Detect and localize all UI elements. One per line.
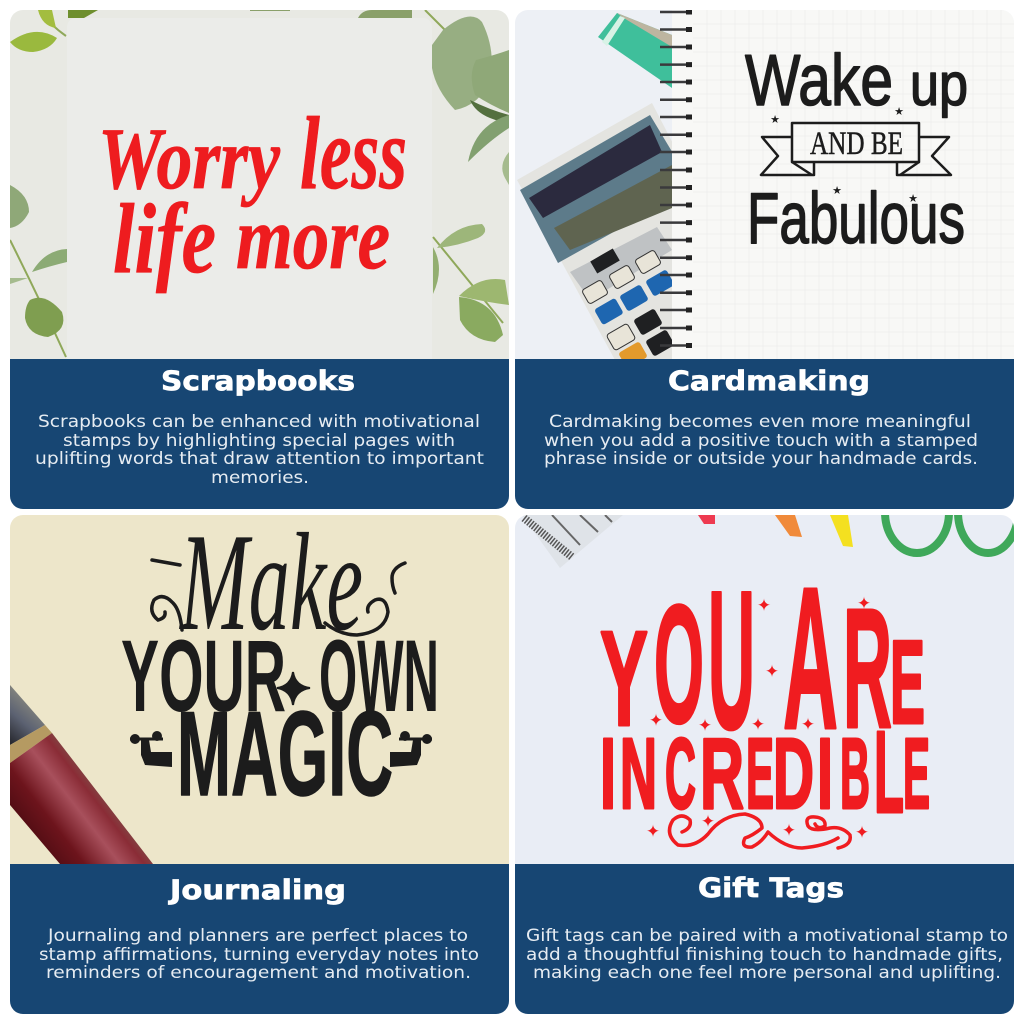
stamp phrase: Wake up and be Fabulous: up (910, 51, 968, 118)
caption block: Cardmaking (515, 359, 1014, 509)
stamp phrase: Make your own magic: Make (179, 505, 363, 660)
description: Gift Tags: making each one feel more personal and uplifting. (533, 963, 1001, 983)
stamp phrase: You are incredible: A (783, 545, 838, 771)
flourish (669, 814, 850, 848)
photo: desk with ruler, highlighters and scissors (515, 515, 1014, 864)
panel: Cardmaking (515, 10, 1014, 509)
caption block: Scrapbooks (10, 359, 509, 509)
stamp phrase: You are incredible: I (817, 718, 833, 830)
stamp phrase: You are incredible: Y (600, 603, 648, 754)
stamp phrase: Worry less life more (102, 116, 406, 294)
stamp phrase: You are incredible: R (700, 718, 744, 830)
panel: Scrapbooks (10, 10, 509, 509)
stamp phrase: Worry less life more: Worry (98, 111, 281, 208)
stamp phrase: You are incredible: E (890, 616, 925, 749)
sparkles: ✦ (757, 596, 771, 616)
photo: cream paper with fountain pen (10, 515, 509, 864)
sparkles: ✦ (649, 711, 663, 731)
caption block: Journaling (10, 864, 509, 1014)
description: Scrapbooks: memories. (211, 468, 309, 488)
description: Journaling: reminders of encouragement and motivation. (46, 963, 471, 983)
icon: eraser (598, 13, 672, 88)
sparkles: ✦ (646, 822, 660, 842)
panel: Journaling: OWN (319, 619, 439, 733)
stamp phrase: You are incredible (600, 588, 930, 850)
stars: ★ (908, 192, 918, 205)
icon: flexed arm left (130, 731, 172, 767)
sparkles: ✦ (801, 715, 815, 735)
description: Scrapbooks: uplifting words that draw attention to important (35, 449, 484, 469)
stars: ★ (832, 184, 842, 197)
stamp phrase: You are incredible: N (620, 718, 657, 830)
description: Scrapbooks: stamps by highlighting special pages with (63, 431, 455, 451)
photo: white card among green leaves (10, 10, 509, 368)
stars: ★ (894, 105, 904, 118)
icon: calculator (517, 103, 672, 359)
icon: fountain pen (10, 685, 153, 864)
sparkles: ✦ (751, 715, 765, 735)
stamp phrase: Wake up and be Fabulous: Wake (745, 41, 893, 121)
photo: calculator, eraser and spiral notebook (515, 10, 1014, 369)
stamp phrase: You are incredible: R (843, 574, 892, 764)
stamp phrase: You are incredible: I (600, 718, 616, 830)
scissors handles (881, 515, 1014, 557)
heading: Scrapbooks: Scrapbooks (161, 366, 355, 397)
stamp phrase: You are incredible: C (665, 718, 696, 830)
description: Scrapbooks: Scrapbooks can be enhanced with motivational (38, 412, 480, 432)
description: Scrapbooks (35, 412, 484, 488)
stamp phrase: You are incredible: E (746, 718, 774, 830)
stamp phrase: You are incredible: B (840, 718, 870, 830)
description: Gift Tags (526, 926, 1008, 983)
panel: Journaling (10, 505, 509, 1014)
heading: Journaling: Journaling (168, 875, 346, 906)
description: Gift Tags: add a thoughtful finishing touch to handmade gifts, (526, 945, 1003, 965)
stamp phrase: Wake up and be Fabulous (744, 52, 966, 244)
stamp phrase: You are incredible: U (708, 550, 755, 770)
panel: Gift Tags: E (903, 718, 930, 830)
stamp phrase: Make your own magic (122, 532, 436, 797)
stamp phrase: Make your own magic: YOUR (121, 619, 286, 733)
sparkles: ✦ (698, 716, 712, 736)
stamp phrase: You are incredible: O (654, 570, 704, 758)
description: Cardmaking: when you add a positive touch with a stamped (544, 431, 978, 451)
sparkles: ✦ (855, 823, 869, 843)
description: Journaling: Journaling and planners are perfect places to (47, 926, 468, 946)
sparkles: ✦ (857, 594, 871, 614)
highlighters (698, 515, 853, 547)
decorative swirls (152, 560, 405, 635)
description: Cardmaking: phrase inside or outside your handmade cards. (544, 449, 978, 469)
heading: Gift Tags: Gift Tags (698, 873, 844, 904)
description: Cardmaking: Cardmaking becomes even more meaningful (549, 412, 971, 432)
panel: Gift Tags (515, 471, 1018, 1014)
description: Gift Tags: Gift tags can be paired with a motivational stamp to (526, 926, 1008, 946)
stamp phrase: Worry less life more: life (113, 183, 216, 294)
stars: ★ (770, 113, 780, 126)
stamp phrase: Worry less life more: less (300, 96, 407, 211)
sparkles: ✦ (701, 812, 715, 832)
sparkles: ✦ (782, 821, 796, 841)
heading: Cardmaking: Cardmaking (668, 366, 870, 397)
spiral binding (660, 12, 692, 346)
stamp phrase: You are incredible: L (874, 707, 904, 837)
description: Cardmaking (544, 412, 978, 469)
ruler (522, 515, 623, 568)
banner ribbon (761, 123, 951, 175)
notebook page with grid (672, 10, 1014, 359)
sparkles: ✦ (765, 662, 779, 682)
description: Journaling (39, 926, 479, 983)
stars (770, 105, 918, 205)
stamp phrase: You are incredible: D (773, 718, 814, 830)
plus sparkle (277, 672, 310, 705)
stamp phrase: Worry less life more: more (236, 189, 390, 288)
stamp phrase: Make your own magic: MAGIC (177, 687, 393, 821)
stamp phrase: Wake up and be Fabulous: AND BE (810, 126, 903, 162)
caption block: Gift Tags (515, 864, 1014, 1014)
icon: flexed arm right (390, 731, 432, 767)
sparkles (646, 594, 871, 843)
description: Journaling: stamp affirmations, turning everyday notes into (39, 945, 479, 965)
